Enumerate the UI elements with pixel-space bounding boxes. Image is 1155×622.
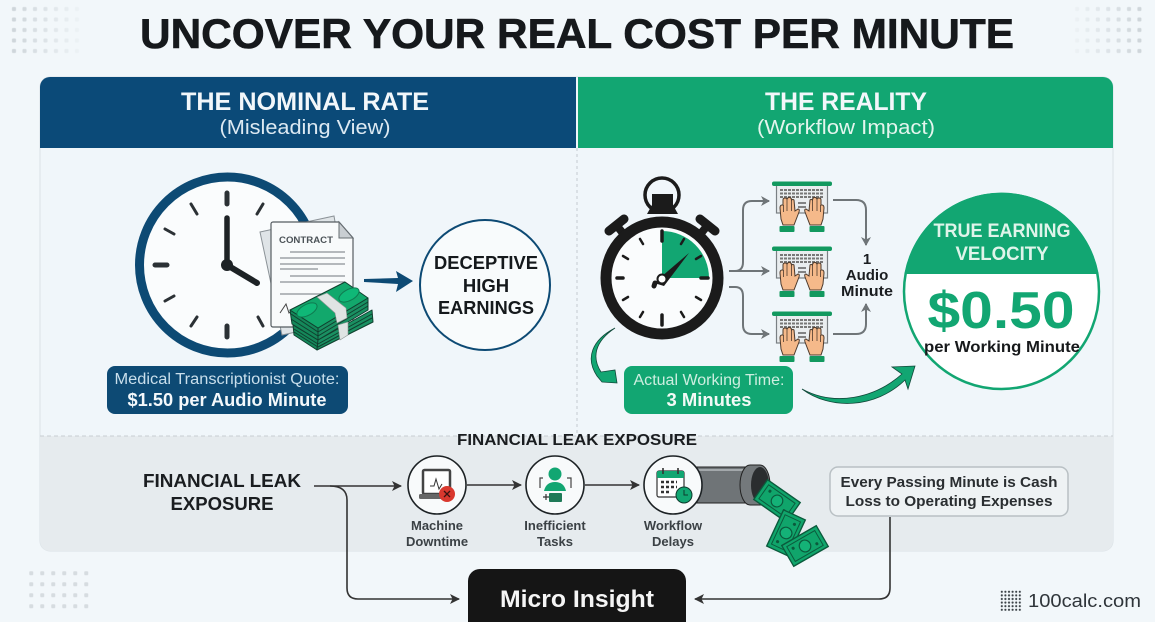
heading: financial leak exposure: FINANCIAL LEAK EXPOSURE bbox=[457, 432, 697, 449]
icon: wall clock bbox=[140, 177, 316, 353]
working time pill: Actual Working Time: bbox=[634, 372, 784, 389]
quote pill bbox=[107, 366, 348, 414]
label: 1 audio minute bbox=[841, 251, 893, 300]
callout: cash loss: Every Passing Minute is Cash bbox=[840, 475, 1058, 491]
callout: deceptive high earnings: EARNINGS bbox=[438, 297, 534, 318]
badge: true earning velocity: VELOCITY bbox=[956, 244, 1049, 265]
panel header: the nominal rate bbox=[40, 77, 576, 148]
panel header: the reality: (Workflow Impact) bbox=[757, 117, 935, 139]
decorative dots top left bbox=[12, 6, 68, 54]
step: workflow delays: Workflow bbox=[644, 518, 703, 533]
working time pill: 3 Minutes bbox=[666, 389, 752, 410]
step: inefficient tasks: Inefficient bbox=[524, 518, 586, 533]
icon: typing hands bottom bbox=[772, 312, 832, 362]
label: financial leak exposure bbox=[143, 470, 302, 514]
micro insight box bbox=[468, 569, 686, 622]
panel header: the reality: THE REALITY bbox=[765, 88, 927, 116]
icon: falling bills bbox=[754, 480, 828, 566]
icon: contract bbox=[260, 216, 353, 335]
arrows: to micro insight bbox=[330, 486, 890, 599]
label: 1 audio minute: 1 bbox=[863, 251, 871, 268]
callout: deceptive high earnings: HIGH bbox=[463, 275, 509, 296]
arrows: typing hands to audio minute bbox=[833, 200, 866, 334]
step: inefficient tasks: Tasks bbox=[537, 534, 573, 549]
callout: cash loss: Loss to Operating Expenses bbox=[846, 494, 1052, 510]
title: UNCOVER YOUR REAL COST PER MINUTE bbox=[140, 10, 1014, 57]
label: financial leak exposure: FINANCIAL LEAK bbox=[143, 470, 302, 491]
arrows: flow between leak steps bbox=[314, 485, 639, 486]
badge: true earning velocity: per Working Minute bbox=[924, 339, 1080, 356]
arrows: stopwatch to typing hands bbox=[729, 201, 769, 334]
icon: typing hands top bbox=[772, 182, 832, 232]
step: inefficient tasks bbox=[524, 456, 586, 549]
arrow: working time to earning velocity bbox=[802, 366, 915, 403]
panel header: the nominal rate: THE NOMINAL RATE bbox=[181, 88, 429, 116]
quote pill: Medical Transcriptionist Quote: bbox=[114, 371, 340, 388]
micro insight box: Micro Insight bbox=[500, 586, 654, 613]
badge: true earning velocity: TRUE EARNING bbox=[934, 221, 1070, 242]
step: machine downtime: Machine bbox=[411, 518, 463, 533]
step: machine downtime bbox=[406, 456, 468, 549]
decorative dots top right bbox=[1086, 6, 1142, 54]
label: 1 audio minute: Audio bbox=[846, 267, 888, 284]
callout: deceptive high earnings bbox=[420, 220, 550, 350]
icon: leaking pipe bbox=[697, 465, 770, 505]
panel header: the nominal rate: (Misleading View) bbox=[220, 117, 390, 139]
callout: cash loss bbox=[830, 467, 1068, 516]
icon: stopwatch bbox=[606, 178, 718, 334]
working time pill bbox=[624, 366, 793, 414]
arrow: stopwatch to working time bbox=[591, 328, 617, 383]
badge: true earning velocity bbox=[904, 193, 1099, 389]
quote pill: $1.50 per Audio Minute bbox=[128, 389, 326, 410]
arrow: clock to deceptive earnings bbox=[364, 271, 413, 292]
badge: true earning velocity: $0.50 bbox=[928, 282, 1074, 340]
decorative dots bottom left bbox=[26, 568, 92, 612]
label: financial leak exposure: EXPOSURE bbox=[170, 493, 274, 514]
label: 1 audio minute: Minute bbox=[841, 283, 893, 300]
step: workflow delays bbox=[644, 456, 703, 549]
footer band bbox=[40, 436, 1113, 551]
step: workflow delays: Delays bbox=[652, 534, 694, 549]
callout: deceptive high earnings: DECEPTIVE bbox=[434, 252, 538, 273]
icon: cash stack bbox=[290, 282, 373, 350]
logo: 100calc.com: 100calc.com bbox=[1028, 591, 1141, 611]
icon: contract: CONTRACT bbox=[279, 235, 333, 246]
main panel bbox=[40, 77, 1113, 551]
step: machine downtime: Downtime bbox=[406, 534, 468, 549]
logo: 100calc.com bbox=[1000, 590, 1141, 611]
panel header: the reality bbox=[578, 77, 1113, 148]
icon: typing hands middle bbox=[772, 246, 832, 297]
